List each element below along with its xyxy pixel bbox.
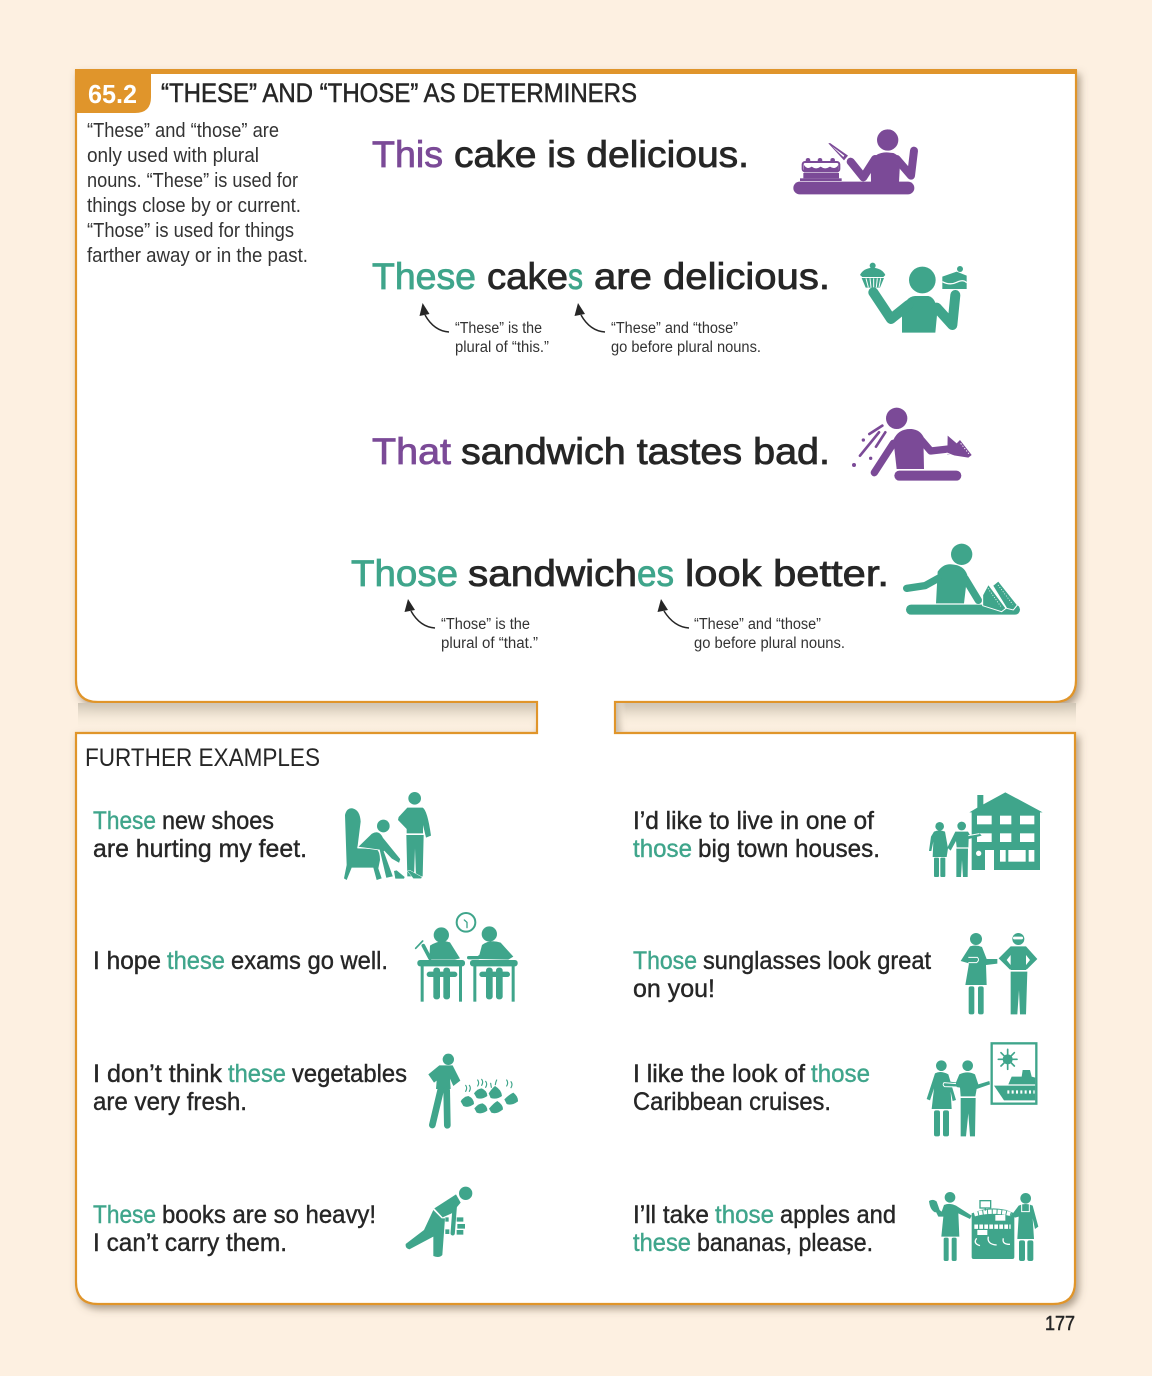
example: apples and bananas: I’ll take — [633, 1201, 709, 1229]
example: apples and bananas: these — [633, 1229, 691, 1257]
icon: man lifting heavy books — [406, 1187, 472, 1257]
section number tab: 65.2 — [88, 79, 137, 109]
example: new shoes: These — [93, 807, 156, 835]
icon: trying on shoes — [344, 792, 431, 880]
explanation text block: “Those” is used for things — [87, 220, 294, 242]
icon: person with sandwiches — [906, 544, 1020, 615]
sentence: these cakes — [372, 256, 830, 297]
example: sunglasses: sunglasses look great — [703, 947, 931, 975]
example: caribbean cruises: those — [811, 1060, 870, 1088]
example: town houses: big town houses. — [698, 835, 880, 863]
note: these is the plural of this: plural of “this.” — [455, 339, 549, 356]
explanation text block: things close by or current. — [87, 195, 301, 217]
sentence: those sandwiches: sandwich — [468, 553, 637, 594]
sentence: those sandwiches: Those — [351, 553, 458, 594]
sentence: those sandwiches — [351, 553, 889, 594]
page number: 177 — [1045, 1313, 1075, 1335]
sentence: these cakes: s — [568, 256, 583, 297]
icon: couple with sunglasses — [961, 933, 1037, 1014]
icon: person slicing cake — [793, 129, 914, 194]
note: go before plural nouns — [574, 303, 761, 356]
sentence: these cakes: These — [372, 256, 476, 297]
example: vegetables: these — [228, 1060, 286, 1088]
example: heavy books: books are so heavy! — [162, 1201, 376, 1229]
note: go before plural nouns (2): go before plural nouns. — [694, 635, 845, 652]
top rule — [75, 69, 1077, 74]
heading: further examples: FURTHER EXAMPLES — [85, 744, 320, 772]
note: those is the plural of that: “Those” is the — [441, 616, 530, 633]
sentence: those sandwiches: es — [637, 553, 674, 594]
example: caribbean cruises: Caribbean cruises. — [633, 1088, 831, 1116]
icon: couple and cruise poster — [927, 1043, 1036, 1136]
example: vegetables: I don’t think — [93, 1060, 223, 1088]
explanation text block: only used with plural — [87, 145, 259, 167]
heading: “THESE” AND “THOSE” AS DETERMINERS — [161, 78, 637, 108]
example: exams: exams go well. — [231, 947, 388, 975]
example: apples and bananas: apples and — [780, 1201, 896, 1229]
example: heavy books: These — [93, 1201, 156, 1229]
example: vegetables: are very fresh. — [93, 1088, 247, 1116]
example: sunglasses — [633, 947, 931, 1003]
example: vegetables — [93, 1060, 407, 1116]
sentence: these cakes: are delicious. — [594, 256, 830, 297]
sentence: that sandwich: That — [372, 431, 452, 472]
example: apples and bananas: those — [715, 1201, 774, 1229]
example: heavy books: I can’t carry them. — [93, 1229, 287, 1257]
icon: customer at fruit stall — [929, 1192, 1038, 1261]
example: town houses: those — [633, 835, 692, 863]
panel: main outline with connector — [76, 71, 1076, 1304]
example: vegetables: vegetables — [292, 1060, 407, 1088]
explanation text block — [87, 120, 308, 267]
note: go before plural nouns (2) — [658, 599, 845, 652]
example: new shoes — [93, 807, 307, 863]
note: these is the plural of this: “These” is the — [455, 320, 542, 337]
example: sunglasses: Those — [633, 947, 697, 975]
note: those is the plural of that: plural of “that.” — [441, 635, 538, 652]
explanation text block: “These” and “those” are — [87, 120, 279, 142]
sentence: this cake: cake is delicious. — [454, 134, 749, 175]
icon: man looking at smelly vegetables — [428, 1054, 518, 1125]
example: new shoes: are hurting my feet. — [93, 835, 307, 863]
example: town houses — [633, 807, 880, 863]
note: go before plural nouns: “These” and “those” — [611, 320, 738, 337]
sentence: this cake: This — [372, 134, 443, 175]
note: go before plural nouns (2): “These” and “those” — [694, 616, 821, 633]
explanation text block: farther away or in the past. — [87, 245, 308, 267]
example: caribbean cruises: I like the look of — [633, 1060, 805, 1088]
example: exams — [93, 947, 388, 975]
example: sunglasses: on you! — [633, 975, 715, 1003]
example: town houses: I’d like to live in one of — [633, 807, 874, 835]
example: apples and bananas: bananas, please. — [697, 1229, 873, 1257]
sentence: these cakes: cake — [487, 256, 568, 297]
example: exams: I hope — [93, 947, 161, 975]
explanation text block: nouns. “These” is used for — [87, 170, 298, 192]
sentence: that sandwich: sandwich tastes bad. — [461, 431, 830, 472]
note: go before plural nouns: go before plural nouns. — [611, 339, 761, 356]
icon: person holding cupcake and cake — [860, 263, 967, 333]
example: apples and bananas — [633, 1201, 896, 1257]
note: these is the plural of this — [420, 303, 549, 356]
section number tab — [75, 72, 151, 113]
note: those is the plural of that — [404, 599, 538, 652]
example: caribbean cruises — [633, 1060, 870, 1116]
icon: couple and town house — [929, 792, 1043, 877]
icon: students at desks with clock — [416, 913, 518, 1002]
example: new shoes: new shoes — [162, 807, 274, 835]
icon: person spitting out sandwich — [852, 408, 972, 481]
sentence: those sandwiches: look better. — [685, 553, 889, 594]
example: heavy books — [93, 1201, 376, 1257]
example: exams: these — [167, 947, 225, 975]
